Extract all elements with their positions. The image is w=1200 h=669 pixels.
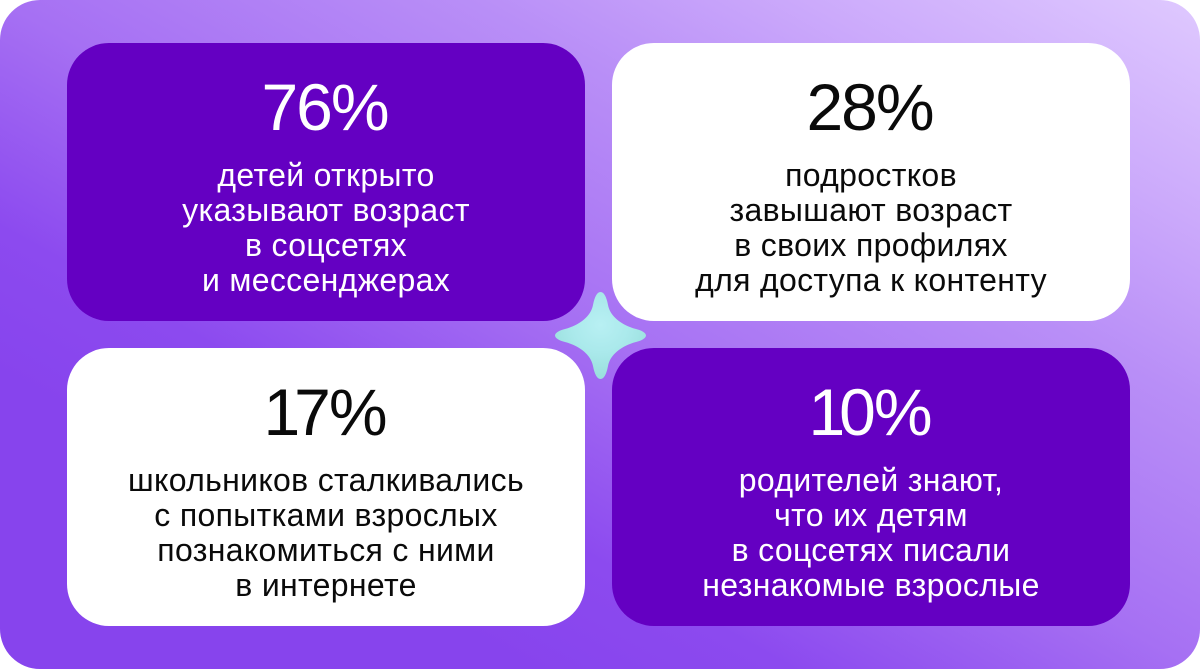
text: parents know: незнакомые взрослые	[702, 567, 1040, 603]
text: teens inflate age: подростков	[785, 157, 957, 193]
text: parents know	[702, 462, 1040, 603]
text: teens inflate age: для доступа к контенту	[695, 262, 1047, 298]
icon: four-pointed star	[555, 292, 646, 379]
text: teens inflate age: в своих профилях	[734, 227, 1008, 263]
text: children state age: детей открыто	[217, 157, 435, 193]
panel: 10% parents	[612, 348, 1130, 626]
panel: 17% schoolchildren	[67, 348, 585, 626]
text: children state age: указывают возраст	[182, 192, 470, 228]
text: schoolchildren and adults: школьников сталкивались	[128, 462, 524, 498]
stat: 76%: 76%	[261, 70, 388, 144]
stat: 17%: 17%	[263, 375, 386, 449]
text: parents know: родителей знают,	[739, 462, 1003, 498]
panel: 76% children	[67, 43, 585, 321]
text: schoolchildren and adults: в интернете	[235, 567, 417, 603]
stat: 10%: 10%	[808, 375, 931, 449]
text: parents know: что их детям	[774, 497, 968, 533]
text: children state age: и мессенджерах	[202, 262, 450, 298]
text: teens inflate age: завышают возраст	[729, 192, 1013, 228]
text: children state age	[182, 157, 470, 298]
stat: 28%: 28%	[806, 70, 933, 144]
panel: 28% teens	[612, 43, 1130, 321]
text: schoolchildren and adults: познакомиться с ними	[157, 532, 495, 568]
text: schoolchildren and adults	[128, 462, 524, 603]
text: parents know: в соцсетях писали	[732, 532, 1010, 568]
text: teens inflate age	[695, 157, 1047, 298]
text: children state age: в соцсетях	[245, 227, 407, 263]
text: schoolchildren and adults: с попытками взрослых	[154, 497, 498, 533]
